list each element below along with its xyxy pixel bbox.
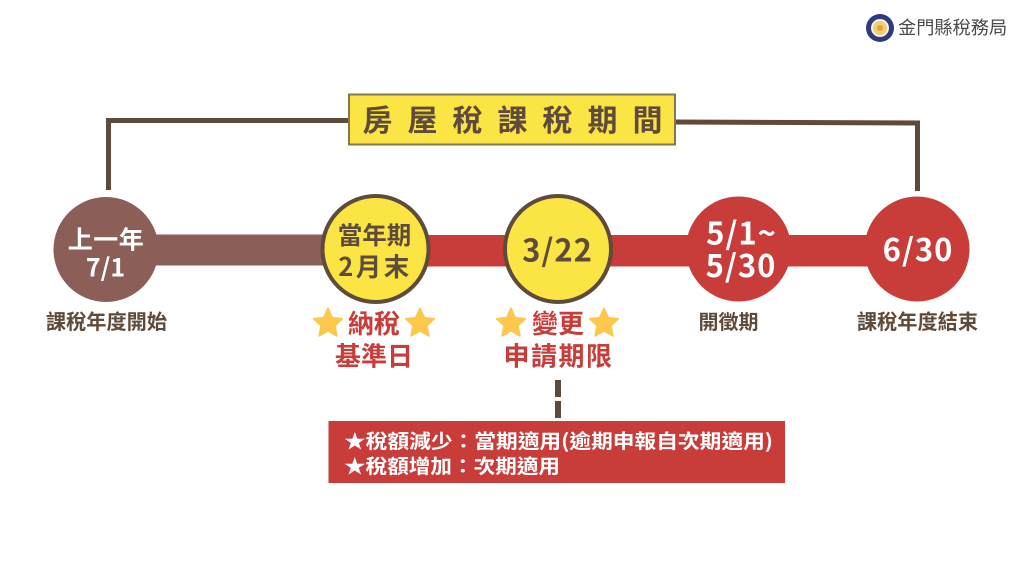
node: end of February: 當年期 bbox=[338, 217, 411, 252]
node: 6/30: 6/30 bbox=[883, 225, 953, 270]
callout: application rules: ★稅額減少：當期適用(逾期申報自次期適用) bbox=[344, 425, 773, 454]
callout: application rules bbox=[328, 421, 785, 483]
node: 3/22 bbox=[505, 196, 611, 302]
label: fiscal year start: 課稅年度開始 bbox=[46, 306, 167, 335]
dashed connector bbox=[555, 380, 561, 418]
node: start of previous year bbox=[54, 197, 158, 302]
label: tax base date: 納稅 bbox=[348, 304, 400, 341]
timeline bar: brown segment bbox=[140, 234, 340, 266]
node: 3/22: 3/22 bbox=[522, 226, 593, 270]
timeline bar: red segment bbox=[410, 235, 890, 266]
logo: tax bureau: 金門縣稅務局 bbox=[898, 14, 1007, 40]
label: collection period: 開徵期 bbox=[698, 306, 758, 335]
callout: application rules: ★稅額增加：次期適用 bbox=[344, 450, 560, 479]
bracket line: right bbox=[675, 122, 918, 191]
label: change application deadline bbox=[496, 304, 618, 374]
label: tax base date bbox=[314, 304, 434, 374]
node: 5/1 to 5/30: 5/1~ bbox=[706, 208, 777, 254]
node: 6/30 bbox=[864, 196, 970, 302]
node: start of previous year: 上一年 bbox=[68, 220, 144, 256]
node: 5/1 to 5/30 bbox=[686, 196, 791, 302]
bracket line: left bbox=[108, 120, 350, 190]
node: 5/1 to 5/30: 5/30 bbox=[706, 241, 776, 286]
icon: left star bbox=[496, 308, 526, 336]
node: end of February bbox=[322, 196, 428, 302]
icon: right star bbox=[590, 308, 618, 336]
label: change application deadline: 變更 bbox=[532, 304, 584, 341]
node: start of previous year: 7/1 bbox=[86, 248, 125, 284]
icon: left star bbox=[314, 308, 342, 336]
label: change application deadline: 申請期限 bbox=[503, 336, 614, 374]
node: end of February: 2月末 bbox=[338, 247, 412, 284]
icon: right star bbox=[406, 308, 434, 336]
title box: 房屋稅課稅期間 bbox=[362, 96, 662, 140]
label: fiscal year end: 課稅年度結束 bbox=[857, 306, 978, 335]
label: tax base date: 基準日 bbox=[335, 336, 413, 374]
